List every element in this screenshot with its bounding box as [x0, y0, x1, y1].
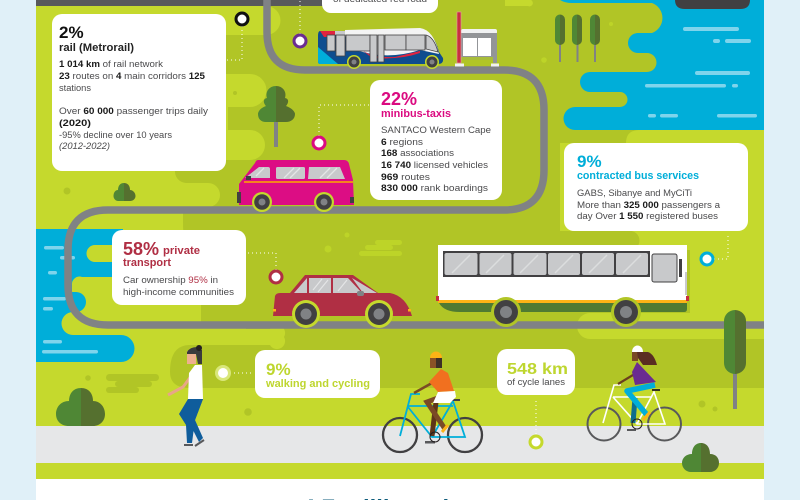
card: rail: (2020) — [59, 118, 91, 129]
card: walking and cycling: walking and cycling — [265, 378, 370, 390]
decorative clouds and dots — [64, 22, 718, 416]
card: minibus-taxis: 830 000 rank boardings — [381, 183, 488, 194]
marker: minibus-taxis — [313, 137, 325, 149]
card: minibus-taxis: 168 associations — [381, 148, 454, 159]
card: cycle lanes: of cycle lanes — [507, 377, 565, 388]
contracted bus — [436, 245, 689, 327]
card: rail: 23 routes on 4 main corridors 125 — [59, 71, 206, 82]
card: rail: stations — [59, 83, 91, 94]
card: rail: Over 60 000 passenger trips daily — [59, 106, 208, 117]
card: contracted bus services: More than 325 000 passengers a — [577, 200, 721, 211]
card: private transport: transport — [123, 257, 171, 269]
card: cycle lanes — [497, 349, 575, 395]
three trees — [555, 14, 600, 62]
cyclist: orange shirt — [383, 352, 482, 452]
ferry — [675, 0, 750, 9]
marker: walking and cycling — [216, 366, 230, 380]
card: minibus-taxis: 969 routes — [381, 172, 430, 183]
card: rail: 2% — [59, 23, 84, 42]
card: rail: 1 014 km of rail network — [59, 59, 163, 70]
card: private transport: private — [163, 245, 200, 257]
marker: rail — [236, 13, 248, 25]
river: top right — [560, 0, 764, 130]
tree: right — [724, 310, 746, 409]
card: contracted bus services: GABS, Sibanye and MyCiTi — [577, 188, 692, 199]
marker: cycle lanes — [530, 436, 542, 448]
pedestrian — [168, 345, 204, 446]
marker: private transport — [270, 271, 282, 283]
card: minibus-taxis: 6 regions — [381, 137, 423, 148]
card: dedicated red road — [322, 0, 438, 13]
card: rail: -95% decline over 10 years — [59, 130, 172, 141]
card: private transport — [112, 230, 246, 305]
card: rail: (2012-2022) — [59, 141, 110, 152]
card: contracted bus services: day Over 1 550 registered buses — [577, 211, 718, 222]
bush: small — [114, 183, 136, 201]
marker: contracted bus — [701, 253, 713, 265]
card: minibus-taxis: SANTACO Western Cape — [381, 125, 491, 136]
card: rail: rail (Metrorail) — [59, 42, 134, 54]
tree: centre — [258, 86, 295, 147]
card: minibus-taxis — [370, 80, 502, 200]
card: walking and cycling: 9% — [266, 360, 291, 379]
card: private transport: high-income communities — [123, 287, 234, 298]
sidewalk — [36, 426, 764, 463]
bush: right — [682, 443, 719, 472]
bush: large left — [56, 388, 105, 426]
card: contracted bus services — [564, 143, 748, 231]
card: rail — [52, 14, 226, 171]
minibus taxi — [237, 160, 354, 212]
card: private transport: 58% — [123, 239, 159, 259]
dark road band at top — [36, 0, 325, 6]
card: walking and cycling — [255, 350, 380, 398]
card: minibus-taxis: 16 740 licensed vehicles — [381, 160, 488, 171]
private car — [273, 275, 412, 328]
river: left — [36, 229, 134, 362]
card: cycle lanes: 548 km — [507, 361, 568, 378]
card: private transport: Car ownership 95% in — [123, 275, 218, 286]
river ripples: left — [42, 246, 98, 354]
dotted connectors — [227, 0, 728, 434]
cyclist: purple shirt — [588, 346, 681, 440]
bus: rapid transit — [318, 28, 443, 69]
card: contracted bus services: 9% — [577, 152, 602, 171]
marker: bus rapid transit — [294, 35, 306, 47]
card: contracted bus services: contracted bus services — [577, 170, 699, 182]
winding road — [68, 0, 764, 325]
bus shelter — [455, 12, 499, 66]
card: minibus-taxis: minibus-taxis — [381, 108, 451, 120]
river ripples: top right — [645, 27, 757, 118]
card: minibus-taxis: 22% — [381, 89, 417, 109]
white lower panel — [36, 479, 764, 500]
